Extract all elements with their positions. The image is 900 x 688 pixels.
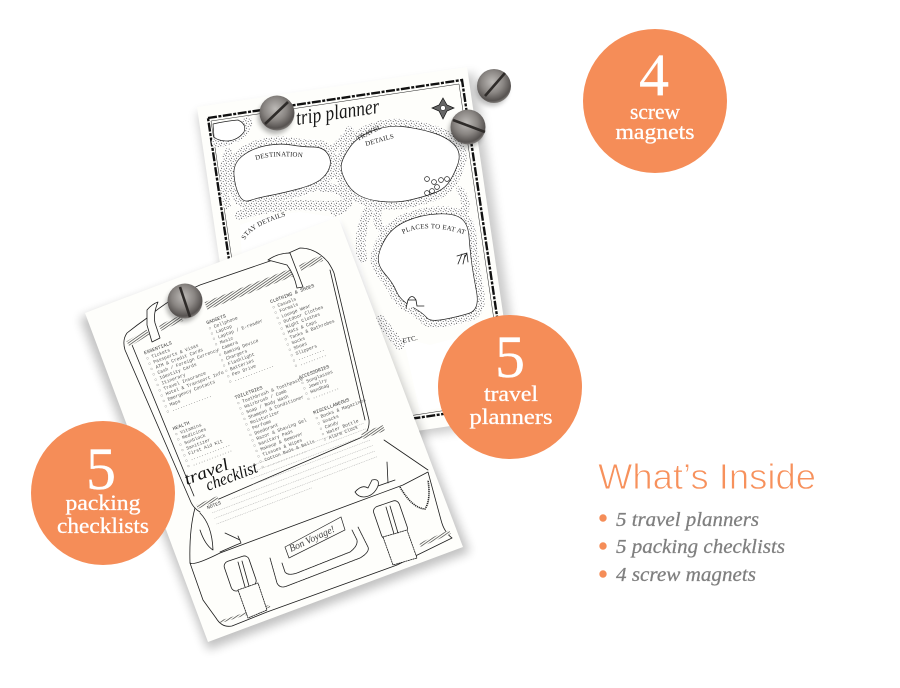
column: accessories: ACCESSORIES [298, 364, 330, 381]
script title: travel checklist [181, 445, 261, 501]
column: toiletries: ○ Perfume [246, 419, 272, 433]
map: region shapes [213, 120, 500, 412]
column: toiletries: ○ Sanitary Pads [252, 429, 294, 449]
list: contents: 5 travel planners [616, 509, 759, 531]
column: gadgets: ○ Laptop [210, 324, 233, 337]
column: accessories: ○ Jewelry [302, 377, 328, 392]
column: toiletries: ○ Moisturizer [244, 409, 281, 428]
column: health: ○ Sanitizer [180, 437, 211, 454]
badge: 5 travel planners: travel [484, 381, 538, 406]
column: miscellaneous: ○ Books & Magazines [315, 397, 367, 422]
notes lines [202, 423, 379, 524]
column: toiletries: ○ Razor & Shaving Gel [250, 417, 308, 444]
handle [270, 527, 368, 587]
column: essentials: ○ Emergency Contacts [162, 379, 216, 405]
heading: What's Inside: What’s Inside [598, 456, 816, 497]
column: gadgets: ○ Music [214, 335, 235, 348]
column: gadgets: ○ Chargers [220, 348, 248, 364]
column: health: ○ First Aid Kit [182, 438, 224, 459]
badge: 5 travel planners [438, 315, 582, 459]
column: essentials: ○ Identity Cards [153, 362, 198, 383]
badge: 4 screw magnets [583, 29, 727, 173]
suitcase body [190, 440, 452, 626]
script title: travel checklist: travel [181, 455, 231, 489]
column: clothing and shoes: ○ Shoes [288, 341, 308, 354]
column: essentials: ○ Hotel & Transport Info [160, 370, 225, 399]
column: accessories: ○ Handbag [304, 383, 330, 397]
column: toiletries: ○ Shampoo & Conditioner [242, 394, 305, 423]
left strap [147, 302, 160, 342]
column: toiletries: ○ Toothbrush & Toothpaste [236, 376, 304, 407]
column: clothing and shoes: ○ Outdoor Clothes [277, 304, 324, 327]
column: clothing and shoes: ○ Tanks & Bathrobes [284, 318, 336, 343]
list: contents: 5 packing checklists [616, 536, 785, 558]
lid hatching [206, 272, 293, 306]
column: health: ○ ............... [185, 443, 231, 464]
map labels: DETAILS [365, 133, 395, 148]
badge: 5 packing checklists [31, 421, 175, 565]
map labels: TRAVEL [356, 124, 383, 143]
column: toiletries: ○ Hairbrush / Comb [238, 388, 288, 412]
bird ornament [355, 480, 395, 497]
icon: compass [432, 98, 454, 119]
column: clothing and shoes: ○ .......... [292, 348, 325, 364]
map labels: PLACES TO EAT AT [401, 224, 466, 234]
badge: 5 packing checklists: 5 [86, 436, 116, 502]
column: gadgets: ○ Batteries [224, 358, 255, 375]
column: essentials: ○ ATM & Credit Cards [149, 347, 204, 373]
column: gadgets: ○ Camera [216, 340, 239, 353]
column: gadgets: GADGETS [206, 313, 227, 326]
badge: 5 packing checklists: checklists [57, 513, 149, 538]
badge: 4 screw magnets: screw [630, 99, 680, 124]
column: clothing and shoes: ○ Night Clothes [280, 312, 321, 332]
icon: screw magnet 3 [449, 110, 486, 148]
column: gadgets: ○ Pen Drive [226, 363, 257, 380]
icon: screw magnet 2 [476, 69, 511, 106]
column: toiletries: ○ Makeup & Remover [254, 431, 304, 455]
column: toiletries: ○ Deodorant [248, 422, 280, 439]
column: clothing and shoes: ○ Slippers [290, 343, 318, 359]
column: toiletries: ○ ............... [261, 449, 307, 471]
column: miscellaneous: MISCELLANEOUS [312, 397, 350, 416]
column: clothing and shoes: ○ Socks [286, 336, 306, 348]
chain [400, 480, 429, 509]
badge: 4 screw magnets: magnets [616, 119, 694, 144]
right strap [268, 253, 303, 288]
column: health: HEALTH [172, 420, 191, 432]
panel: trip planner sheet [194, 70, 515, 440]
column: miscellaneous: ○ Snacks [317, 413, 340, 427]
icon: screw magnet 1 [258, 96, 294, 134]
column: gadgets: ○ Flashlight [222, 352, 256, 369]
badge: 5 travel planners: 5 [495, 324, 525, 390]
column: essentials: ○ Travel Insurance [157, 370, 207, 394]
icon: screw magnet 4 [166, 284, 202, 322]
column: toiletries: TOILETRIES [234, 385, 264, 401]
column: clothing and shoes: ○ Lounge Wear [275, 303, 312, 322]
column: clothing and shoes: ○ Hats & Caps [282, 319, 318, 338]
column: essentials: ESSENTIALS [143, 340, 173, 356]
suitcase lid [124, 248, 384, 512]
column: essentials: ○ Passports & Visas [147, 343, 200, 367]
map labels: ETC. [402, 335, 419, 345]
left buckle [223, 555, 267, 618]
column: miscellaneous: ○ Alarm Clock [323, 424, 359, 443]
column: essentials: ○ Cash / Foreign Currency [151, 347, 219, 378]
column: miscellaneous: ○ Water Bottle [321, 418, 360, 438]
column: clothing and shoes: ○ Formals [273, 302, 299, 316]
column: clothing and shoes: CLOTHING & SHOES [269, 283, 315, 305]
luggage tag [285, 517, 345, 558]
map: stippled coastline bands [217, 122, 477, 345]
map labels [242, 124, 466, 345]
list: contents [599, 509, 785, 586]
column: toiletries: ○ Cotton Buds & Balls [258, 439, 316, 465]
column: gadgets: ○ Laptop / E-reader [212, 318, 264, 343]
column: gadgets: ○ Cellphone [208, 315, 239, 332]
notes label: NOTES [206, 500, 222, 511]
column: toiletries: ○ Soap / Body Wash [240, 394, 290, 417]
column: gadgets: ○ ............... [228, 364, 275, 385]
checklist columns [135, 277, 391, 529]
icon: palms [457, 253, 468, 264]
badge: 4 screw magnets: 4 [639, 42, 669, 108]
column: gadgets: ○ Gaming Device [218, 338, 260, 359]
column: clothing and shoes: ○ Casuals [271, 296, 297, 311]
luggage tag: Bon Voyage! [288, 524, 337, 555]
column: health: ○ ............... [187, 448, 233, 470]
list: contents: 4 screw magnets [616, 564, 756, 586]
map labels: DESTINATION [254, 152, 303, 160]
column: essentials: ○ Itinerary [155, 372, 187, 389]
column: accessories: ○ .......... [307, 386, 340, 403]
column: health: ○ Medicines [176, 426, 207, 443]
column: essentials: ○ Maps [164, 398, 182, 410]
badge: 5 packing checklists: packing [66, 490, 140, 515]
column: clothing and shoes: ○ .......... [294, 353, 327, 370]
panel: travel checklist sheet [80, 217, 470, 650]
column: toiletries: ○ Tissues & Wipes [256, 437, 303, 460]
icon: hut [406, 296, 424, 308]
badge: 5 travel planners: planners [470, 404, 552, 429]
column: essentials: ○ Tickets [145, 347, 171, 362]
column: health: ○ Vitamins [174, 422, 203, 438]
column: essentials: ○ ............... [166, 394, 212, 415]
right buckle [372, 499, 417, 565]
column: miscellaneous: ○ Candy [319, 420, 339, 432]
key and rope [220, 533, 241, 552]
column: health: ○ Sunblock [178, 433, 207, 448]
map border [208, 80, 510, 442]
column: accessories: ○ Sunglasses [300, 369, 334, 387]
script title: travel checklist: checklist [203, 457, 261, 495]
map title: trip planner: trip planner [294, 94, 382, 130]
map labels: STAY DETAILS [242, 212, 285, 240]
icon: map trees [425, 177, 449, 195]
